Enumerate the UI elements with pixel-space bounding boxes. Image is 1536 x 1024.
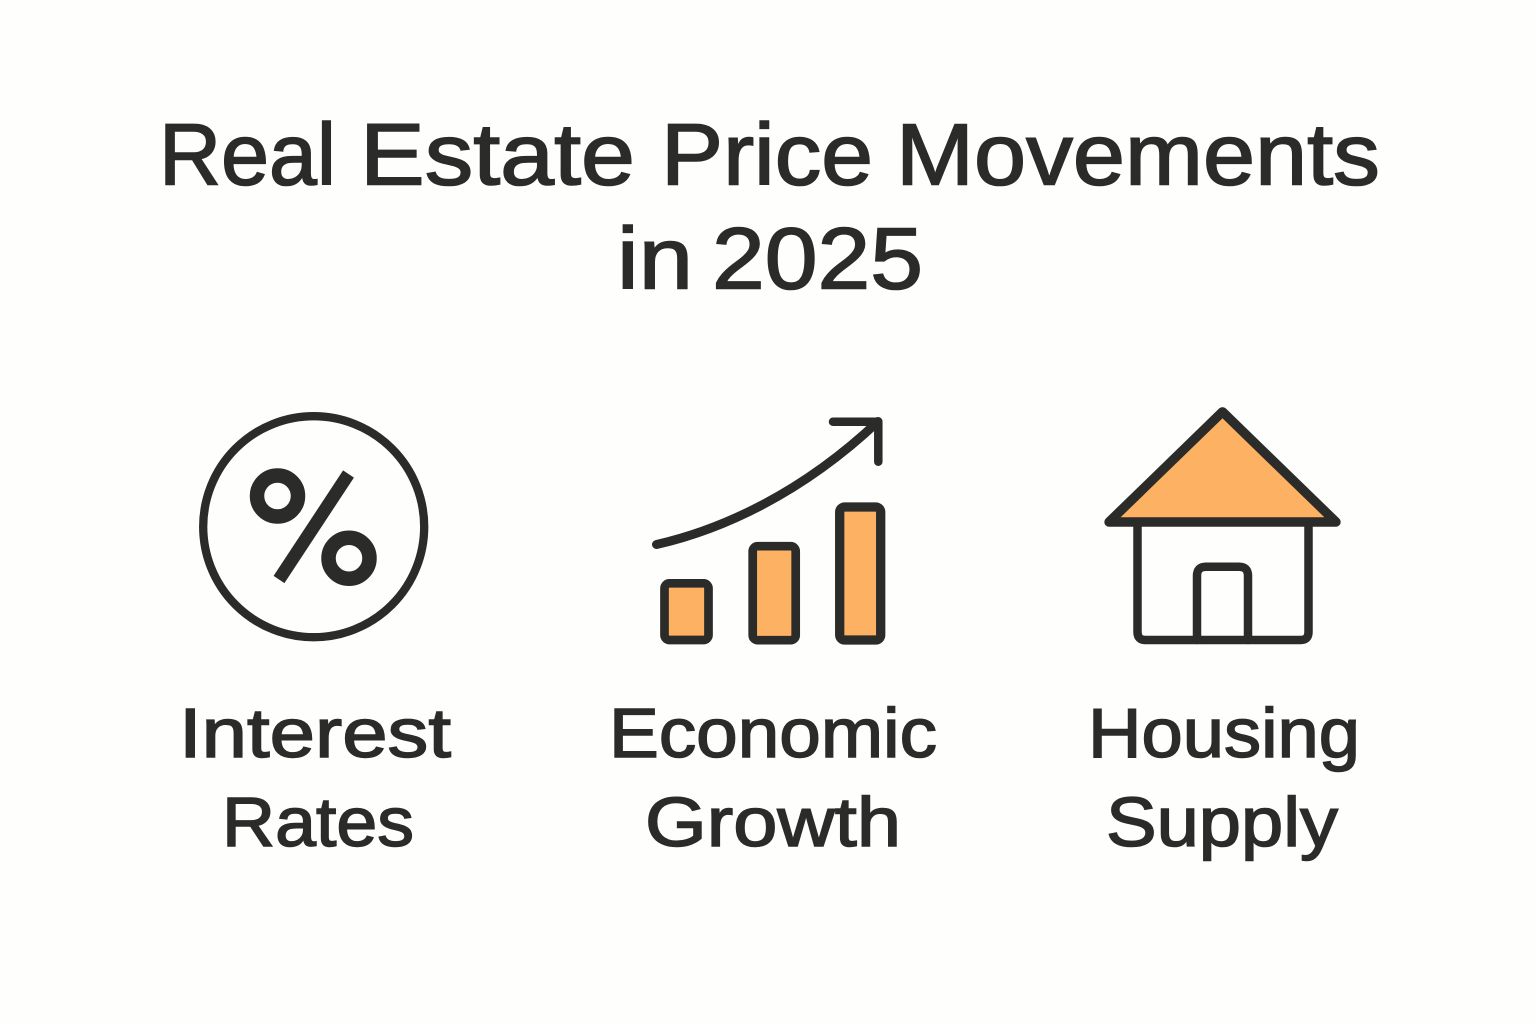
title <box>159 106 1380 308</box>
label: economic growth <box>609 694 937 861</box>
icon: percent in circle <box>203 416 424 637</box>
label: interest rates: Interest <box>179 694 451 772</box>
icon: house <box>1109 412 1336 640</box>
title: Real <box>159 106 336 204</box>
label: housing supply: Housing <box>1088 694 1360 772</box>
label: interest rates: Rates <box>222 783 414 861</box>
title: Estate <box>360 106 635 204</box>
panel: economic growth <box>609 422 937 861</box>
icon: rising bars and arrow <box>656 422 881 640</box>
label: economic growth: Growth <box>645 783 901 861</box>
title: in <box>617 210 693 308</box>
panel: housing supply <box>1088 412 1360 861</box>
title: Movements <box>896 106 1380 204</box>
title: 2025 <box>712 210 923 308</box>
label: housing supply: Supply <box>1106 783 1338 861</box>
title: Price <box>661 106 873 204</box>
label: interest rates <box>179 694 451 861</box>
label: economic growth: Economic <box>609 694 937 772</box>
label: housing supply <box>1088 694 1360 861</box>
panel: interest rates <box>179 416 451 861</box>
